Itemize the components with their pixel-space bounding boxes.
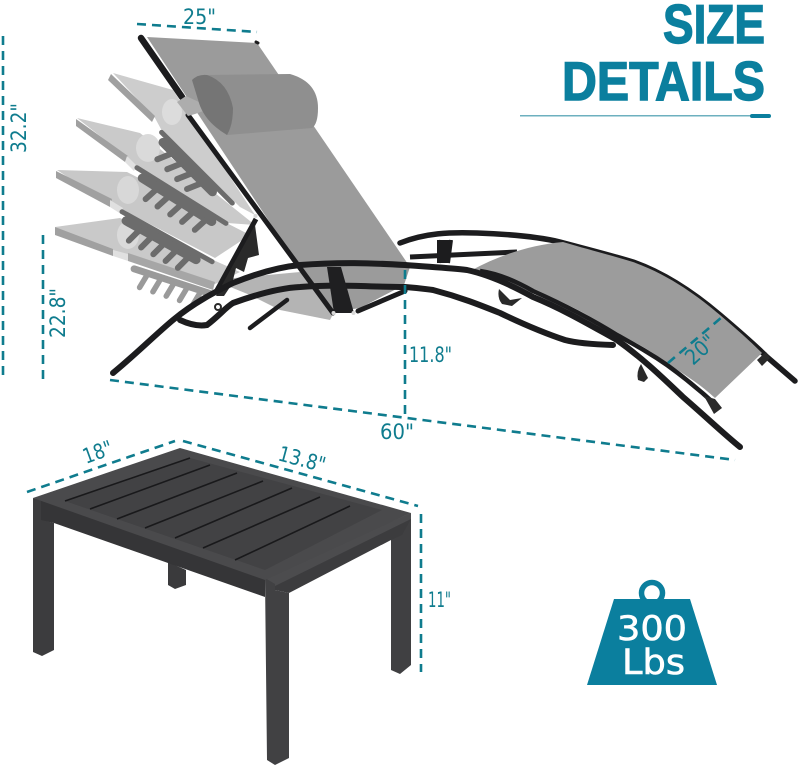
dimension: table width 18 in: 18" [80, 436, 116, 469]
dimension: table width 18 in [27, 436, 175, 492]
dimension: height 22.8 in: 22.8" [46, 288, 70, 338]
heading underline [520, 114, 771, 118]
backrest frame [141, 38, 333, 313]
dimension: height 32.2 in: 32.2" [7, 103, 31, 153]
table top frame [33, 448, 411, 580]
far side rail [400, 233, 795, 381]
leg rest fabric [472, 242, 762, 398]
centre bracket [215, 267, 356, 315]
dimension: seat height 11.8 in: 11.8" [409, 343, 452, 367]
table back leg [168, 562, 186, 589]
dimension: table height 11 in: 11" [428, 588, 451, 612]
dimension: back width 25 in [137, 5, 257, 32]
icon: 300 lbs weight: 300 [617, 609, 687, 649]
heading: size details [562, 0, 765, 112]
icon: 300 lbs weight [587, 582, 717, 685]
table front leg [265, 578, 289, 765]
dimension: leg rest width 20 in: 20" [680, 330, 721, 370]
heading line 2: DETAILS [562, 50, 765, 112]
headrest strap [177, 96, 212, 116]
lounge chair [113, 37, 795, 447]
ghost seat under rails [213, 272, 340, 320]
table top slats [65, 458, 382, 570]
ghost backrest 4 [55, 218, 240, 309]
table right apron [265, 513, 411, 593]
ghost backrest 1 [108, 73, 255, 219]
table right leg [391, 513, 411, 674]
dimension: back width 25 in: 25" [183, 5, 216, 29]
leg rest support clips [498, 289, 770, 414]
dimension: table length 13.8 in: 13.8" [276, 442, 328, 477]
dimension: length 60 in: 60" [380, 420, 414, 444]
table long apron [38, 497, 265, 597]
headrest pillow [192, 74, 318, 135]
near side rails and legs [113, 263, 740, 447]
leg rest inner frame [480, 271, 718, 407]
dimension: leg rest width 20 in [668, 317, 722, 370]
dimension: length 60 in [110, 380, 735, 460]
backrest fabric [147, 37, 410, 312]
side table [33, 448, 411, 765]
ghost backrest 3 [56, 170, 250, 281]
icon: 300 lbs weight: Lbs [622, 643, 685, 683]
ghost recline positions [55, 73, 340, 320]
reclining strut [216, 214, 259, 296]
dimension: table length 13.8 in [183, 441, 418, 506]
table left leg [33, 498, 54, 656]
ghost backrest 2 [76, 118, 255, 242]
